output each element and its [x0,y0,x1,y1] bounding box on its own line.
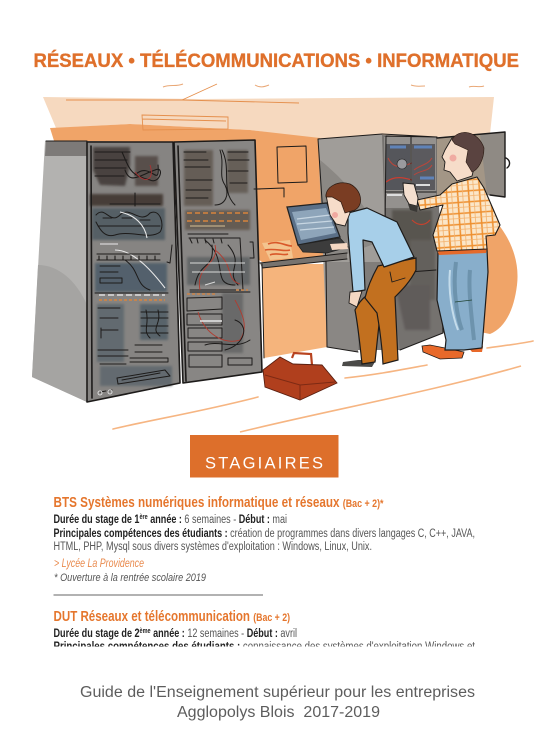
BTS internship duration: 6 semaines - Début : mai [185,514,292,526]
wall background [43,84,518,358]
illustration: technicians at server racks [32,84,533,432]
footer line 1: Guide de l'Enseignement supérieur pour les entreprises [80,684,475,701]
text block: DUT [54,609,476,653]
DUT internship duration: Durée du stage de 2 [54,628,185,640]
BTS internship duration: ère [139,514,148,521]
DUT heading: DUT Réseaux et télécommunication (Bac + 2) [54,609,290,625]
BTS skills continued: HTML, PHP, Mysql sous divers systèmes d'exploitation : Windows, Linux, Unix. [54,541,372,553]
BTS school: > Lycée La Providence [54,558,144,570]
text block: BTS [54,495,475,584]
laptop [262,203,348,260]
DUT internship duration: ème [140,628,151,635]
server rack right [318,134,443,352]
man in blue shirt [326,183,416,367]
floor lines [113,341,533,432]
BTS internship duration: année : [148,514,182,526]
man in plaid shirt [403,132,500,359]
toolbox [263,353,337,400]
BTS internship duration: Durée du stage de 1 [54,514,182,526]
server rack left [32,141,180,402]
BTS heading: BTS Systèmes numériques informatique et réseaux (Bac + 2)* [54,495,384,511]
server rack centre [174,140,262,383]
open rack door [437,132,510,197]
title: RÉSEAUX • TÉLÉCOMMUNICATIONS • INFORMATIQUE [34,49,519,72]
section banner: stagiaires [190,435,338,478]
DUT internship duration: 12 semaines - Début : avril [188,628,302,640]
BTS footnote: * Ouverture à la rentrée scolaire 2019 [54,572,206,584]
counter [260,253,347,358]
section banner: stagiaires: STAGIAIRES [205,454,323,472]
footer [80,684,475,721]
DUT internship duration: année : [151,628,185,640]
footer line 2: Agglopolys Blois 2017-2019 [177,704,380,721]
BTS skills: Principales compétences des étudiants : création de programmes dans divers langages C, C++, JAVA, [54,528,475,540]
DUT skills, cropped line: Principales compétences des étudiants : connaissance des systèmes d'exploitation Windows et [54,641,476,653]
